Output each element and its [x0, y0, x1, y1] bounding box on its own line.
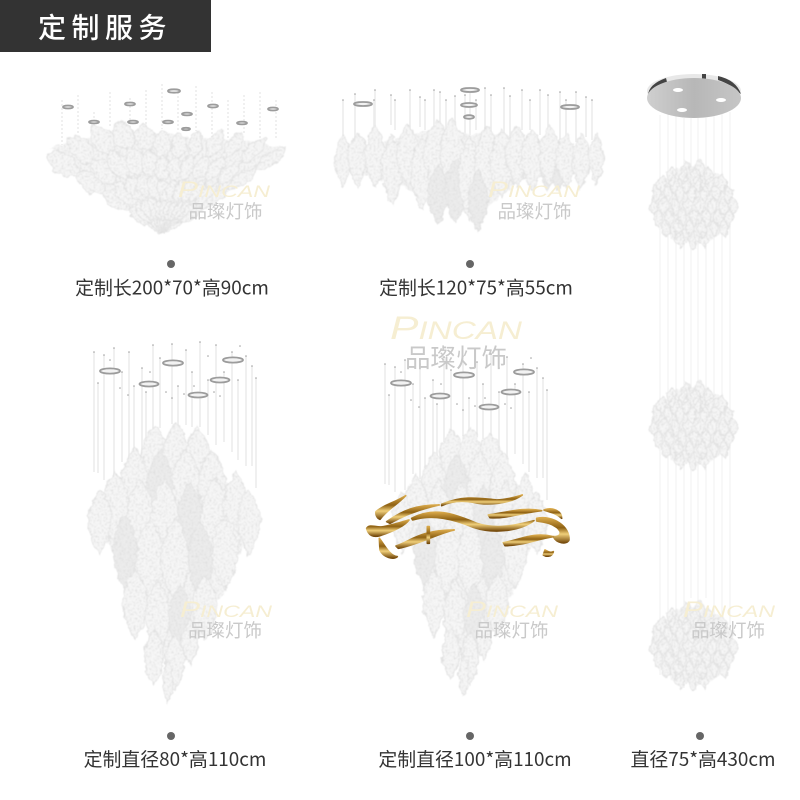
label: diameter 80 height 110: 定制直径80*高110cm	[84, 745, 266, 772]
crystal fan	[42, 117, 290, 241]
watermark: PINCAN lower middle: P INCAN	[466, 597, 559, 622]
watermark: PINCAN top middle: P INCAN	[488, 177, 581, 202]
chandelier: diamond with gold waves 100x110	[367, 354, 569, 696]
watermark: PINCAN large center: P INCAN	[390, 310, 523, 346]
crystal leaves	[335, 118, 603, 232]
watermark: PINCAN lower middle	[466, 597, 559, 643]
watermark: PINCAN lower right: 品璨灯饰	[691, 617, 765, 643]
label: size 120x75x55: 定制长120*75*高55cm	[379, 274, 573, 300]
crystal ball top	[650, 160, 737, 250]
gold wave ring	[367, 495, 569, 558]
watermark: PINCAN lower left: 品璨灯饰	[188, 617, 262, 643]
ceiling rings	[63, 89, 278, 130]
watermark: PINCAN large center	[390, 310, 523, 375]
marker dots	[167, 260, 704, 740]
crystal body	[392, 427, 547, 696]
watermark: PINCAN large center: 品璨灯饰	[405, 338, 507, 375]
watermark: PINCAN top middle	[488, 177, 581, 224]
label: diameter 75 height 430: 直径75*高430cm	[630, 745, 776, 772]
crystal ball bottom	[650, 601, 737, 691]
watermark: PINCAN top left: P INCAN	[178, 177, 271, 202]
chandelier: leaf band 120x75x55	[335, 88, 603, 232]
watermark: PINCAN lower left: P INCAN	[180, 597, 273, 622]
crystal body	[89, 423, 260, 702]
watermark: PINCAN top left	[178, 177, 271, 224]
hanging wires and rings	[385, 354, 547, 500]
watermark: PINCAN lower right	[683, 597, 776, 643]
watermark: PINCAN lower left	[180, 597, 273, 643]
header banner: 定制服务	[38, 6, 172, 46]
header banner	[0, 0, 211, 52]
watermark: PINCAN top middle: 品璨灯饰	[497, 198, 572, 224]
chandelier: ball pendant with canopy	[647, 74, 741, 691]
crystal ball middle	[650, 381, 737, 471]
watermark: PINCAN lower middle: 品璨灯饰	[474, 617, 549, 643]
label: size 200x70x90: 定制长200*70*高90cm	[75, 274, 269, 300]
chandelier: wide fan 200x70x90	[42, 84, 290, 241]
ceiling canopy	[647, 74, 741, 118]
watermark: PINCAN top left: 品璨灯饰	[188, 198, 263, 224]
ceiling rings	[354, 88, 579, 119]
chandelier: diamond 80x110	[89, 342, 260, 702]
label: diameter 100 height 110: 定制直径100*高110cm	[378, 745, 572, 772]
watermark: PINCAN lower right: P INCAN	[683, 597, 776, 622]
hanging wires and rings	[94, 342, 256, 488]
